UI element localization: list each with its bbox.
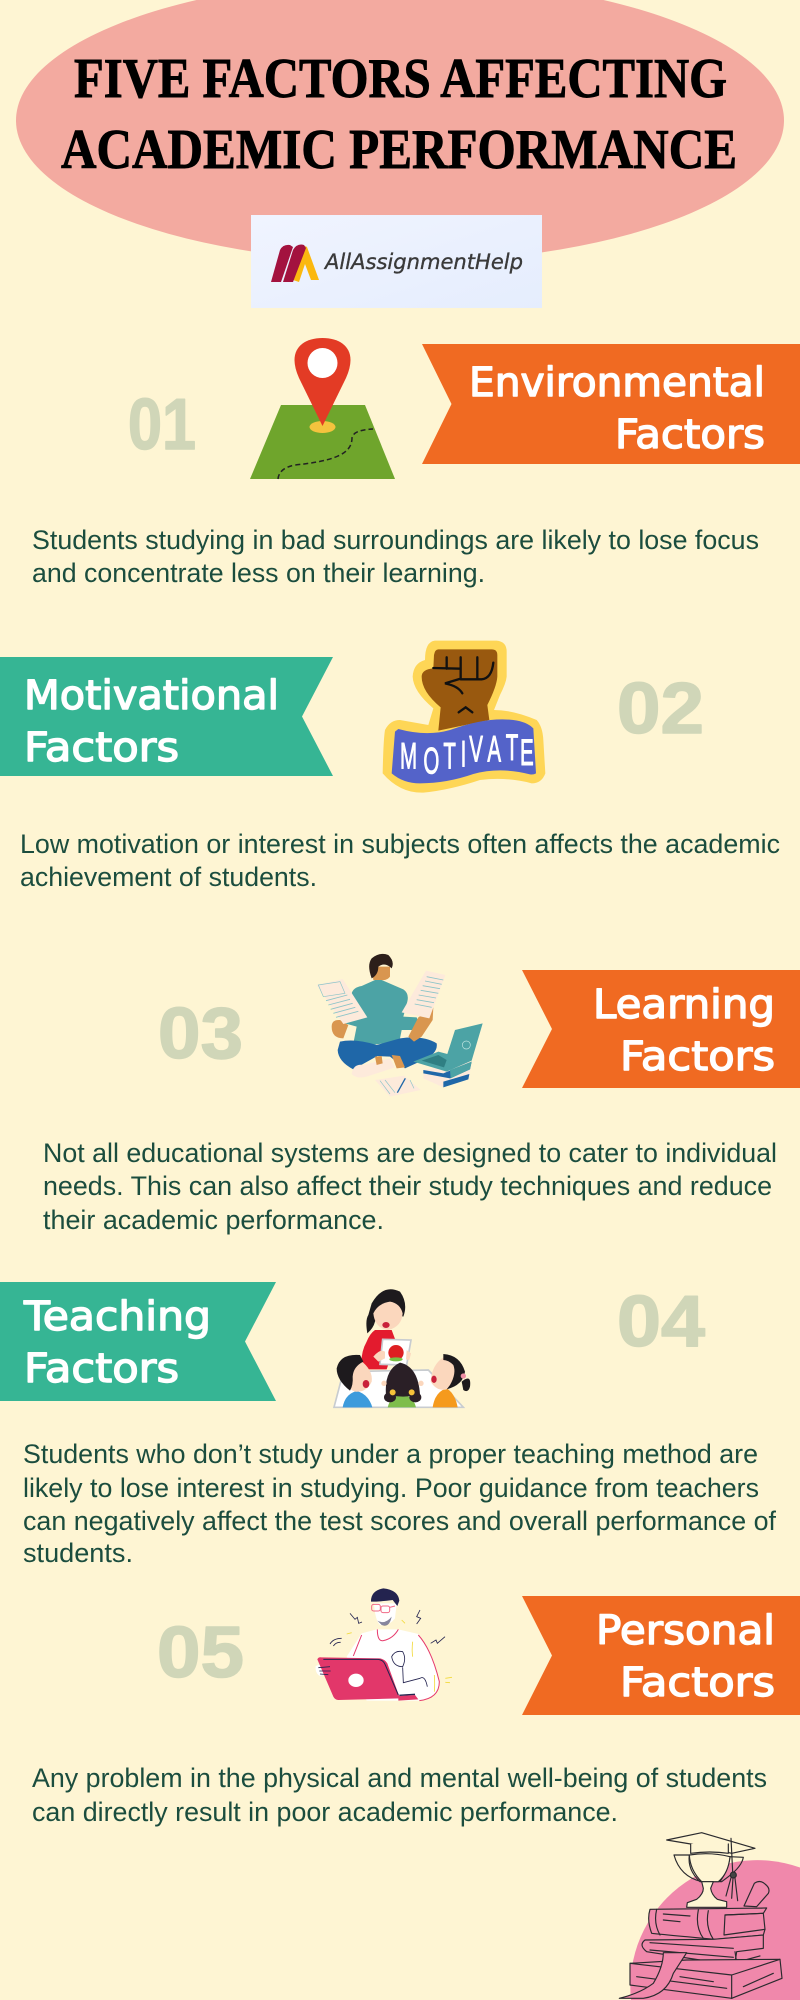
- banner: environmental factors: [422, 344, 800, 464]
- text: learning: Not all educational systems are designed to cater to individual: [43, 1138, 777, 1168]
- icon: motivate fist sticker: MOTIVATE: [400, 728, 534, 782]
- text: teaching: can negatively affect the test scores and overall performance of: [23, 1506, 776, 1536]
- text: teaching: Students who don’t study under a proper teaching method are: [23, 1439, 758, 1469]
- number 04: 04: [617, 1282, 705, 1362]
- decoration: pink circle behind books: [630, 1860, 800, 2000]
- text: environmental: Students studying in bad surroundings are likely to lose focus: [32, 525, 759, 555]
- icon: motivate fist sticker: [383, 641, 545, 793]
- text: motivational: [20, 829, 780, 892]
- icon: teacher with children: [334, 1289, 470, 1407]
- title ellipse: [16, 0, 784, 262]
- text: motivational: Low motivation or interest in subjects often affects the academic: [20, 829, 780, 859]
- number 02: 02: [617, 669, 704, 749]
- text: learning: needs. This can also affect their study techniques and reduce: [43, 1171, 772, 1201]
- text: environmental: [32, 525, 759, 588]
- logo card: AllAssignmentHelp: [323, 250, 523, 274]
- title: [61, 48, 737, 181]
- number 03: 03: [158, 994, 243, 1074]
- banner: teaching factors: Teaching: [23, 1294, 211, 1340]
- banner: teaching factors: [0, 1282, 276, 1401]
- icon: stressed person at laptop: [316, 1588, 452, 1701]
- text: personal: Any problem in the physical and mental well-being of students: [32, 1763, 767, 1793]
- icon: map pin on green land: [250, 338, 395, 479]
- text: learning: [43, 1138, 777, 1235]
- logo card: [251, 215, 542, 308]
- text: teaching: likely to lose interest in studying. Poor guidance from teachers: [23, 1473, 759, 1503]
- icon: books, trophy and graduation cap: [619, 1833, 782, 1998]
- banner: motivational factors: Factors: [24, 725, 179, 771]
- number 01: 01: [128, 385, 196, 465]
- number 05: 05: [157, 1613, 244, 1693]
- banner: environmental factors: Environmental: [469, 360, 765, 406]
- banner: motivational factors: [0, 657, 333, 776]
- banner: environmental factors: Factors: [615, 412, 765, 458]
- text: personal: [32, 1763, 767, 1827]
- banner: learning factors: Factors: [620, 1034, 775, 1080]
- text: teaching: students.: [23, 1538, 133, 1568]
- banner: motivational factors: Motivational: [24, 673, 279, 719]
- banner: learning factors: [522, 970, 800, 1088]
- text: learning: their academic performance.: [43, 1205, 384, 1235]
- text: personal: can directly result in poor academic performance.: [32, 1797, 618, 1827]
- text: motivational: achievement of students.: [20, 862, 317, 892]
- text: environmental: and concentrate less on their learning.: [32, 558, 485, 588]
- banner: learning factors: Learning: [593, 982, 775, 1028]
- icon: student with papers and laptop: [317, 954, 483, 1097]
- banner: personal factors: Factors: [620, 1660, 775, 1706]
- banner: teaching factors: Factors: [24, 1346, 179, 1392]
- banner: personal factors: Personal: [596, 1608, 775, 1654]
- text: teaching: [23, 1439, 776, 1568]
- banner: personal factors: [522, 1596, 800, 1715]
